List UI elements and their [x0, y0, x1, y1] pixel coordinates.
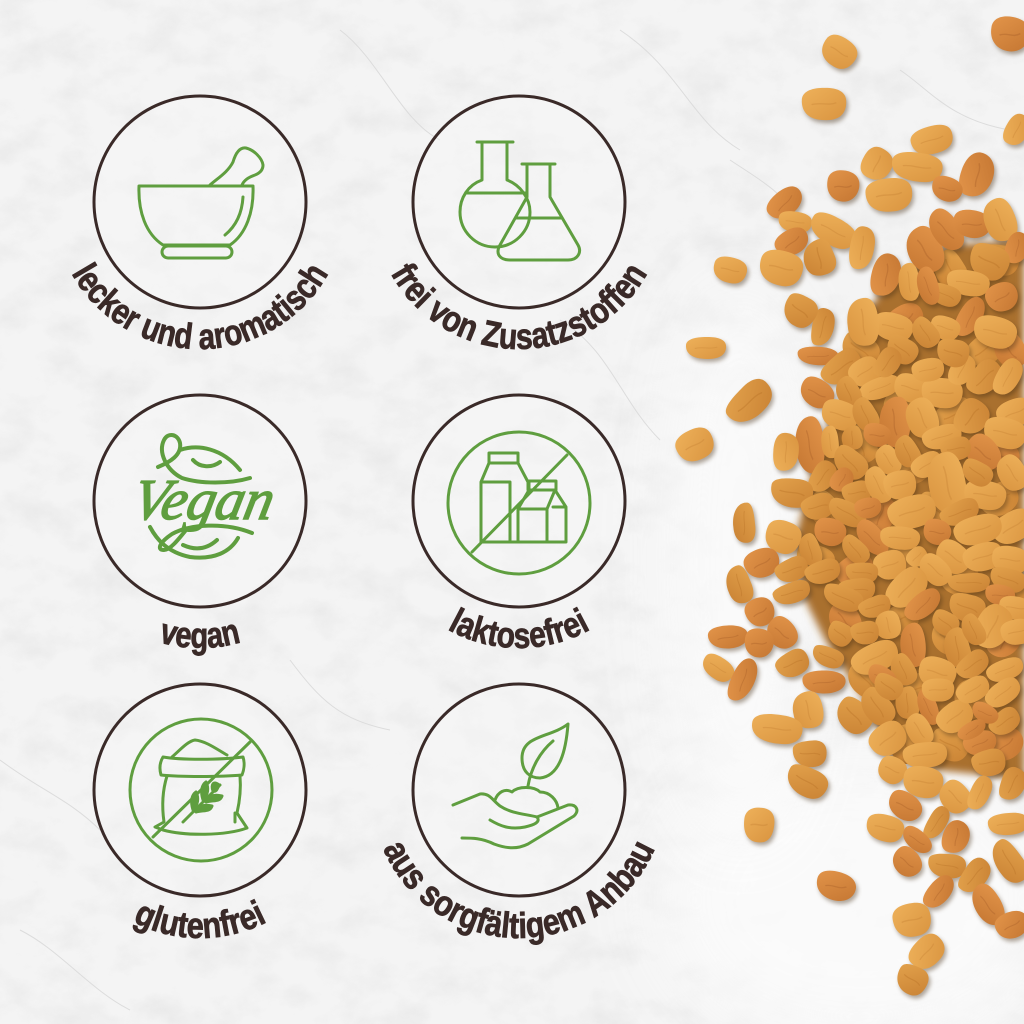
panel: glutenfrei — [92, 682, 308, 939]
script word Vegan: Vegan — [127, 468, 281, 532]
icon: mortar and pestle — [139, 148, 263, 258]
label: vegan: vegan — [162, 623, 240, 656]
label: lecker und aromatisch: lecker und aromatisch — [72, 261, 328, 350]
label: glutenfrei: glutenfrei — [132, 898, 266, 939]
label: aus sorgfältigem Anbau: aus sorgfältigem Anbau — [384, 841, 655, 945]
icon: crossed-out grain sack — [130, 719, 272, 861]
label: frei von Zusatzstoffen: frei von Zusatzstoffen — [391, 263, 648, 350]
panel: vegan — [92, 394, 308, 656]
icon: crossed-out milk cartons — [448, 432, 590, 574]
image: filler seeds inside the pile — [791, 242, 1024, 768]
seed pile shadow mass — [795, 240, 1024, 780]
panel: lecker und aromatisch — [72, 94, 328, 350]
image: scattered fenugreek seeds — [671, 14, 1024, 1000]
label: laktosefrei: laktosefrei — [448, 606, 590, 649]
icon: laboratory flasks — [460, 142, 580, 260]
icon: hand holding seedling — [453, 724, 577, 848]
panel: laktosefrei — [412, 394, 626, 649]
panel: frei von Zusatzstoffen — [391, 94, 648, 350]
icon: vegan script logo with leaves — [127, 435, 281, 558]
panel: aus sorgfältigem Anbau — [384, 682, 655, 945]
